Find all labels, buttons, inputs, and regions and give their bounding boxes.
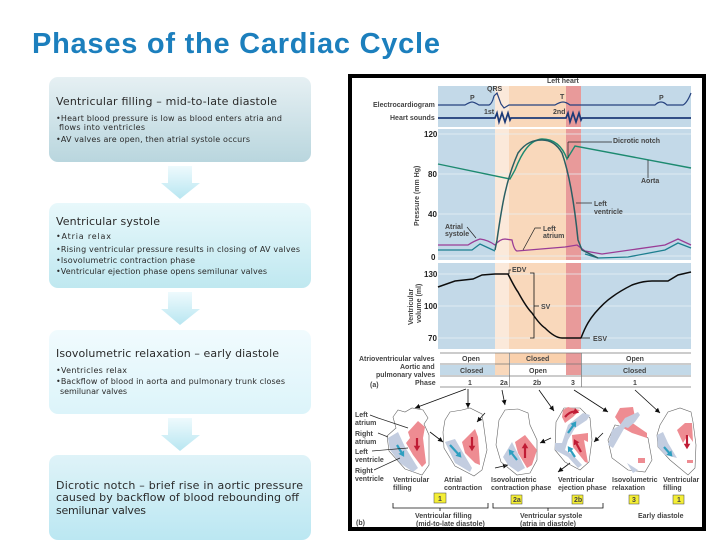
- title: Phases of the Cardiac Cycle: [32, 28, 440, 60]
- row values: Closed: [623, 368, 646, 375]
- text block: ventricular systole bullets: •Ventricular ejection phase opens semilunar valves: [56, 267, 267, 276]
- diagram: ventricular filling heart: [387, 408, 429, 475]
- labels: heart chambers: Left: [355, 449, 368, 456]
- badges: phase numbers: 2b: [574, 497, 582, 504]
- text block: relaxation bullets: semilunar valves: [60, 387, 127, 396]
- text block: dicrotic notch: [56, 479, 303, 517]
- axis: volume: 70: [428, 334, 437, 343]
- curve: left ventricle: [495, 140, 598, 258]
- panel: ventricular systole: [49, 203, 311, 288]
- labels: heart chambers: [355, 412, 408, 483]
- row values: 1: [468, 380, 472, 387]
- diagram: isovolumetric relaxation heart: [608, 407, 652, 473]
- labels: phase captions: filling: [393, 485, 412, 492]
- panel: cardiac cycle figure: [350, 76, 704, 529]
- text block: ventricular systole bullets: •Atria relax: [56, 232, 111, 241]
- arrow: relaxation to notch: [161, 418, 200, 451]
- axis: volume: volume (ml): [416, 284, 423, 323]
- axis: pressure: 80: [428, 170, 437, 179]
- axis: pressure: 40: [428, 210, 437, 219]
- text block: ventricular systole bullets: [56, 232, 300, 276]
- brackets and period captions: Ventricular systole: [520, 513, 582, 520]
- text block: ventricular systole bullets: •Isovolumetric contraction phase: [56, 256, 195, 265]
- labels: heart chambers: Left: [355, 412, 368, 419]
- ECG wave labels: P: [470, 95, 475, 102]
- chart: electrocardiogram and heart sounds: [373, 86, 691, 127]
- axis: pressure: Pressure (mm Hg): [414, 166, 421, 226]
- row values: Closed: [460, 368, 483, 375]
- curve: left atrium lower trace: [438, 243, 691, 258]
- row labels: Aortic and: [400, 364, 435, 371]
- badges: phase numbers: 1: [677, 497, 681, 504]
- arrow: systole to relaxation: [161, 292, 200, 325]
- row values: 2a: [500, 380, 508, 387]
- labels: pressure chart: atrium: [543, 233, 564, 240]
- labels: phase captions: [393, 477, 699, 492]
- panel: dicrotic notch: [49, 455, 311, 540]
- text block: relaxation bullets: •Ventricles relax: [56, 366, 127, 375]
- panel: isovolumetric relaxation: [49, 330, 311, 414]
- row values: 2b: [533, 380, 541, 387]
- text block: ventricular filling bullets: flows into ventricles: [59, 123, 145, 132]
- labels: heart chambers: ventricle: [355, 476, 384, 483]
- text block: ventricular filling bullets: •AV valves are open, then atrial systole occurs: [56, 135, 250, 144]
- row values: Closed: [526, 356, 549, 363]
- table: valves and phases: [359, 353, 691, 389]
- axis: pressure: 0: [431, 253, 436, 262]
- arrows: phase to heart diagrams: [415, 389, 660, 472]
- row labels: pulmonary valves: [376, 372, 435, 379]
- labels: phase captions: filling: [663, 485, 682, 492]
- arrow: filling to systole: [161, 166, 200, 199]
- heading: ventricular filling: Ventricular filling – mid-to-late diastole: [56, 95, 277, 108]
- labels: volume chart: SV: [541, 304, 551, 311]
- row values: Open: [529, 368, 547, 375]
- labels: pressure chart: Left: [594, 201, 608, 208]
- labels: volume chart: [509, 267, 607, 343]
- row values: Open: [462, 356, 480, 363]
- row values: [460, 356, 646, 387]
- ECG wave labels: T: [560, 94, 565, 101]
- brackets and period captions: (b): [356, 520, 365, 527]
- row labels: [359, 356, 436, 389]
- text block: dicrotic notch: semilunar valves: [56, 504, 146, 517]
- ECG wave labels: P: [659, 95, 664, 102]
- badges: phase numbers: 2a: [513, 497, 521, 504]
- ECG wave labels: [470, 86, 664, 116]
- badges: phase numbers: 1: [438, 496, 442, 503]
- badges: phase numbers: 3: [632, 497, 636, 504]
- chart: pressure: [414, 129, 691, 262]
- text block: relaxation bullets: •Backflow of blood in aorta and pulmonary trunk closes: [56, 377, 285, 386]
- ECG wave labels: 1st: [484, 109, 495, 116]
- brackets and period captions: (mid-to-late diastole): [416, 521, 485, 528]
- text block: dicrotic notch: Dicrotic notch – brief rise in aortic pressure: [56, 479, 303, 492]
- diagram: atrial contraction heart: [443, 408, 487, 476]
- labels: phase captions: Isovolumetric: [491, 477, 537, 484]
- labels: volume chart: EDV: [512, 267, 527, 274]
- label: heart sounds: Heart sounds: [390, 115, 435, 122]
- diagram: isovolumetric contraction heart: [496, 409, 537, 475]
- labels: phase captions: Ventricular: [393, 477, 429, 484]
- labels: phase captions: relaxation: [612, 485, 645, 492]
- diagram: ventricular ejection heart: [555, 407, 592, 470]
- labels: pressure chart: Atrial: [445, 224, 463, 231]
- row labels: Phase: [415, 380, 436, 387]
- axis: volume: [408, 270, 438, 343]
- text block: ventricular filling bullets: [56, 114, 282, 144]
- labels: phase captions: Ventricular: [663, 477, 699, 484]
- row labels: Atrioventricular valves: [359, 356, 435, 363]
- curve: aorta: [438, 139, 691, 179]
- heading: left heart: Left heart: [547, 78, 580, 85]
- text block: ventricular filling bullets: •Heart blood pressure is low as blood enters atria and: [56, 114, 282, 123]
- label: electrocardiogram: Electrocardiogram: [373, 102, 435, 109]
- labels: heart chambers: atrium: [355, 420, 376, 427]
- text block: relaxation bullets: [56, 366, 285, 396]
- labels: heart chambers: atrium: [355, 439, 376, 446]
- row values: 1: [633, 380, 637, 387]
- axis: volume: Ventricular: [408, 289, 415, 325]
- labels: phase captions: contraction phase: [491, 485, 551, 492]
- labels: pressure chart: Left: [543, 226, 556, 233]
- curve: ventricular volume: [438, 272, 691, 338]
- chart: ventricular volume: [408, 263, 691, 349]
- row labels: (a): [370, 382, 379, 389]
- labels: phase captions: Isovolumetric: [612, 477, 658, 484]
- panel: ventricular filling: [49, 77, 311, 162]
- labels: pressure chart: systole: [445, 231, 469, 238]
- brackets and period captions: [356, 503, 684, 528]
- labels: heart chambers: Right: [355, 468, 374, 475]
- brackets and period captions: Early diastole: [638, 513, 684, 520]
- text block: ventricular systole bullets: •Rising ventricular pressure results in closing of AV valves: [56, 245, 300, 254]
- labels: pressure chart: [445, 138, 660, 250]
- labels: heart chambers: ventricle: [355, 457, 384, 464]
- diagram: late ventricular filling heart: [657, 408, 696, 475]
- text block: dicrotic notch: caused by backflow of blood rebounding off: [56, 491, 299, 504]
- row values: Open: [626, 356, 644, 363]
- labels: phase captions: Ventricular: [558, 477, 594, 484]
- labels: heart chambers: Right: [355, 431, 374, 438]
- axis: pressure: [414, 130, 438, 262]
- curve: left atrium: [438, 239, 691, 254]
- ECG wave labels: QRS: [487, 86, 502, 93]
- labels: pressure chart: Aorta: [641, 178, 659, 185]
- labels: pressure chart: ventricle: [594, 209, 623, 216]
- badges: phase numbers: [434, 493, 684, 504]
- axis: volume: 100: [424, 302, 438, 311]
- ECG wave labels: 2nd: [553, 109, 565, 116]
- labels: phase captions: ejection phase: [558, 485, 607, 492]
- brackets and period captions: (atria in diastole): [520, 521, 576, 528]
- heading: ventricular systole: Ventricular systole: [56, 215, 160, 228]
- axis: volume: 130: [424, 270, 438, 279]
- brackets and period captions: Ventricular filling: [415, 513, 472, 520]
- labels: volume chart: ESV: [593, 336, 607, 343]
- labels: phase captions: Atrial: [444, 477, 462, 484]
- labels: pressure chart: Dicrotic notch: [613, 138, 660, 145]
- axis: pressure: 120: [424, 130, 438, 139]
- heading: isovolumetric relaxation: Isovolumetric relaxation – early diastole: [56, 347, 279, 360]
- labels: phase captions: contraction: [444, 485, 482, 492]
- row values: 3: [571, 380, 575, 387]
